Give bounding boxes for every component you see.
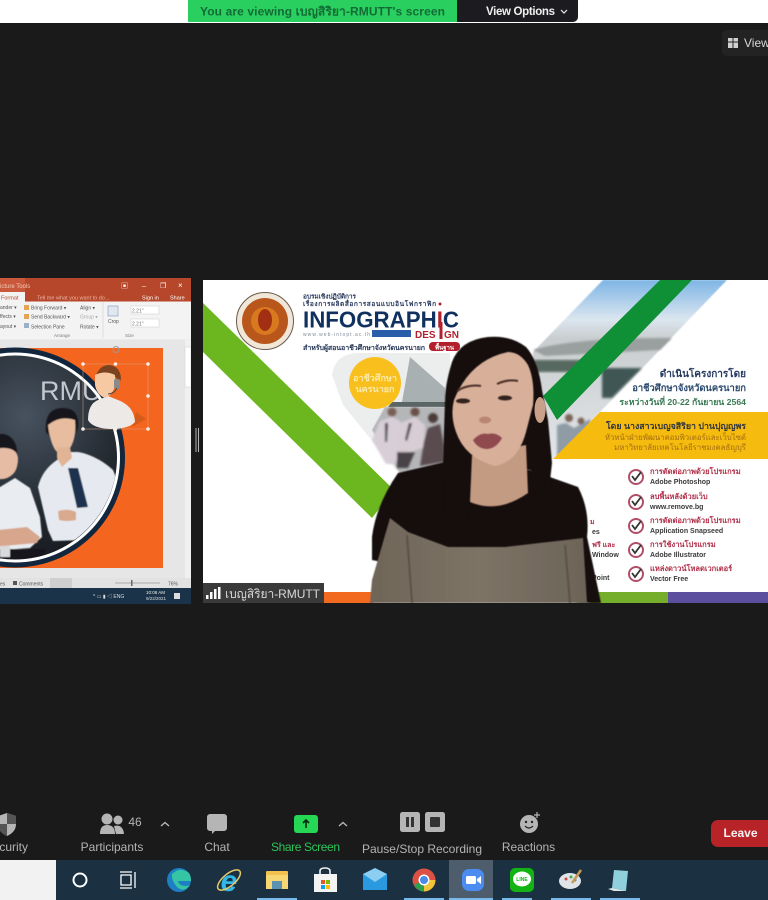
checklist item: Adobe Photoshop: Adobe Photoshop	[650, 479, 710, 486]
presenter neck	[470, 445, 528, 506]
checklist item: Application Snapseed: Application Snapseed	[650, 528, 723, 535]
poster: yellow speaker band: มหาวิทยาลัยเทคโนโลยีราชมงคลธัญบุรี	[614, 443, 746, 452]
checklist item: Application Snapseed: การตัดต่อภาพด้วยโปรแกรม	[650, 515, 741, 525]
toolbar: chat: Chat	[204, 840, 230, 854]
icon: mail	[363, 868, 387, 890]
icon: line	[510, 868, 534, 892]
toolbar: share screen	[271, 815, 347, 854]
icon: line: LINE	[516, 877, 528, 883]
checklist item: Vector Free	[629, 563, 733, 583]
female student	[0, 434, 45, 560]
poster: college emblem	[236, 292, 294, 350]
powerpoint status bar: es	[0, 582, 6, 588]
poster: dark green diagonal	[543, 280, 692, 420]
poster: course title: เรื่องการผลิตสื่อการสอนแบบอินโฟกราฟิก	[303, 298, 436, 308]
toolbar: reactions: Reactions	[502, 840, 555, 854]
icon: notepad	[608, 870, 628, 891]
ribbon tabs: Format	[1, 296, 19, 302]
windows taskbar	[0, 860, 768, 900]
ribbon commands: 2.21"	[132, 308, 144, 314]
poster: course title: GN	[444, 330, 459, 341]
toolbar: participants: 46	[128, 815, 142, 829]
poster: partly hidden list text: Point	[592, 575, 610, 582]
powerpoint status bar: Comments	[19, 582, 44, 588]
panel: presenter video with poster background	[203, 280, 768, 603]
slide: circular photo of students	[0, 348, 125, 568]
ribbon commands: ffects ▾	[0, 314, 16, 320]
windows taskbar in shared screen: 10:08 AM	[146, 590, 165, 595]
poster: yellow speaker band: หัวหน้าฝ่ายพัฒนาคอมพิวเตอร์และเว็บไซต์	[605, 432, 746, 442]
checklist item: Adobe Illustrator: Adobe Illustrator	[650, 552, 706, 559]
powerpoint title bar: –	[142, 283, 146, 290]
call centre agent icon with selection handles	[81, 346, 150, 431]
poster: bottom colour bar	[323, 592, 768, 603]
ribbon commands: Size	[125, 333, 134, 338]
toolbar: participants	[81, 814, 169, 854]
toolbar: security	[0, 813, 28, 854]
checklist item: Adobe Photoshop: การตัดต่อภาพด้วยโปรแกรม	[650, 466, 741, 476]
window divider handle	[196, 428, 198, 452]
poster: course title: INFOGRAPHIC	[303, 306, 459, 332]
poster: course title: สำหรับผู้สอนอาชีวศึกษาจังหวัดนครนายก	[303, 343, 425, 353]
presenter grey dress	[370, 518, 587, 603]
presenter hair	[442, 336, 553, 478]
poster: course title: อบรมเชิงปฏิบัติการ	[303, 292, 356, 300]
ribbon commands: ander ▾	[0, 305, 17, 311]
ribbon commands: Crop	[108, 319, 119, 325]
poster: yellow speaker band: โดย นางสาวเบญจสิริยา ปานปุญญพร	[605, 420, 746, 432]
presenter dress seams	[407, 535, 570, 603]
ribbon commands: Bring Forward ▾	[31, 306, 67, 312]
ribbon commands: Send Backward ▾	[31, 314, 70, 320]
windows taskbar in shared screen: ^ ▭ ▮ ◁ ENG	[93, 594, 124, 600]
banner: viewing screen notice	[188, 0, 457, 22]
ribbon commands: ayout ▾	[0, 324, 17, 330]
poster: course title: พื้นฐาน	[435, 342, 455, 352]
poster: organiser text: อาชีวศึกษาจังหวัดนครนายก	[632, 382, 746, 393]
poster: partly hidden list text	[590, 519, 619, 582]
icon: chrome	[412, 868, 436, 892]
poster: course title: DES	[415, 330, 436, 341]
button: view	[722, 30, 768, 56]
ribbon commands	[0, 302, 191, 340]
button: leave	[711, 820, 768, 847]
checklist item: Adobe Illustrator: การใช้งานโปรแกรม	[650, 539, 716, 549]
poster: building photo band	[533, 280, 727, 459]
poster: checklist	[629, 466, 741, 583]
icon: cortana	[74, 874, 86, 886]
icon: paint	[559, 870, 581, 889]
ribbon tabs: Sign in	[142, 296, 159, 302]
poster: yellow badge: อาชีวศึกษา	[353, 373, 397, 383]
toolbar: chat	[204, 814, 230, 854]
poster: partly hidden list text: Window	[592, 552, 619, 559]
slide: circular photo of students: RMUT	[40, 376, 118, 406]
powerpoint title bar: ❐	[160, 282, 166, 290]
checklist item: Adobe Photoshop	[629, 466, 741, 486]
panel: shared powerpoint screen	[0, 278, 191, 604]
icon: microsoft store	[314, 868, 337, 892]
slide: orange background	[0, 348, 163, 568]
poster: organiser text: ดำเนินโครงการโดย	[660, 367, 746, 380]
ribbon commands: Rotate ▾	[80, 324, 99, 330]
top white strip	[0, 0, 768, 23]
ribbon commands: 2.21"	[132, 322, 144, 328]
poster: light green diagonal	[203, 303, 394, 518]
name tag	[203, 583, 324, 603]
checklist item: remove.bg	[629, 490, 708, 511]
toolbar: share screen: Share Screen	[271, 840, 340, 854]
poster: building and students photo	[332, 353, 450, 475]
poster: student group	[372, 408, 444, 468]
poster: organiser text: ระหว่างวันที่ 20-22 กันยายน 2564	[619, 395, 746, 407]
banner: viewing screen notice: You are viewing เบญสิริยา-RMUTT's screen	[200, 4, 445, 18]
ribbon tabs: Share	[170, 296, 185, 302]
ribbon tabs	[0, 292, 191, 302]
male student	[38, 408, 125, 541]
icon: internet explorer	[214, 865, 244, 898]
checklist item: Vector Free: แหล่งดาวน์โหลดเวกเตอร์	[650, 563, 733, 573]
windows taskbar in shared screen: 9/22/2021	[146, 596, 167, 601]
ribbon commands: Group ▾	[80, 314, 98, 320]
icon: zoom	[462, 869, 484, 891]
ribbon commands: Align ▾	[80, 306, 96, 312]
presenter eyes nose and mouth	[456, 380, 518, 449]
presenter black top	[372, 462, 601, 603]
checklist item: Vector Free: Vector Free	[650, 576, 688, 583]
icon: edge	[167, 868, 191, 892]
presenter	[370, 337, 601, 603]
powerpoint status bar	[0, 578, 191, 588]
powerpoint title bar	[0, 278, 191, 292]
button: view options: View Options	[486, 6, 555, 18]
icon: task view	[120, 872, 135, 888]
checklist item: Application Snapseed	[629, 515, 741, 535]
poster: course title: www.web-intopt.ac.th	[303, 332, 370, 338]
checklist item: remove.bg: www.remove.bg	[649, 504, 703, 511]
poster: course title	[303, 292, 460, 353]
powerpoint title bar: icture Tools	[0, 284, 30, 290]
name tag: เบญสิริยา-RMUTT	[225, 587, 321, 601]
powerpoint title bar: ▣	[121, 282, 128, 290]
checklist item: remove.bg: ลบพื้นหลังด้วยเว็บ	[650, 490, 708, 501]
icon: internet explorer: e	[221, 865, 237, 898]
presenter face	[452, 352, 533, 466]
toolbar: security: curity	[0, 840, 28, 854]
ribbon tabs: Tell me what you want to do...	[37, 296, 110, 302]
ribbon commands: Selection Pane	[31, 324, 65, 330]
icon: file explorer	[266, 871, 288, 889]
ribbon commands: Arrange	[54, 333, 71, 338]
poster: partly hidden list text: ม	[590, 519, 595, 526]
button: leave: Leave	[723, 826, 758, 840]
poster: yellow badge: นครนายก	[356, 384, 394, 394]
powerpoint title bar: ×	[178, 281, 183, 290]
presenter ear	[534, 397, 546, 423]
poster: yellow badge	[349, 357, 401, 409]
toolbar: participants: Participants	[81, 840, 143, 854]
checklist item: Adobe Illustrator	[629, 539, 716, 559]
powerpoint status bar: 76%	[168, 582, 179, 588]
taskbar running app indicators	[257, 898, 640, 900]
toolbar: pause and stop recording: Pause/Stop Recording	[362, 842, 482, 856]
toolbar: reactions	[502, 812, 555, 854]
poster: partly hidden list text: es	[592, 529, 600, 536]
scrollbar	[185, 340, 191, 578]
poster: partly hidden list text: ฟรี และ	[592, 541, 615, 549]
windows taskbar in shared screen	[0, 588, 191, 604]
button: view options	[457, 0, 578, 22]
poster: students photo on the right	[557, 414, 592, 458]
poster: yellow speaker band	[553, 412, 768, 459]
poster: organiser text	[619, 367, 746, 407]
toolbar: pause and stop recording	[362, 812, 482, 856]
